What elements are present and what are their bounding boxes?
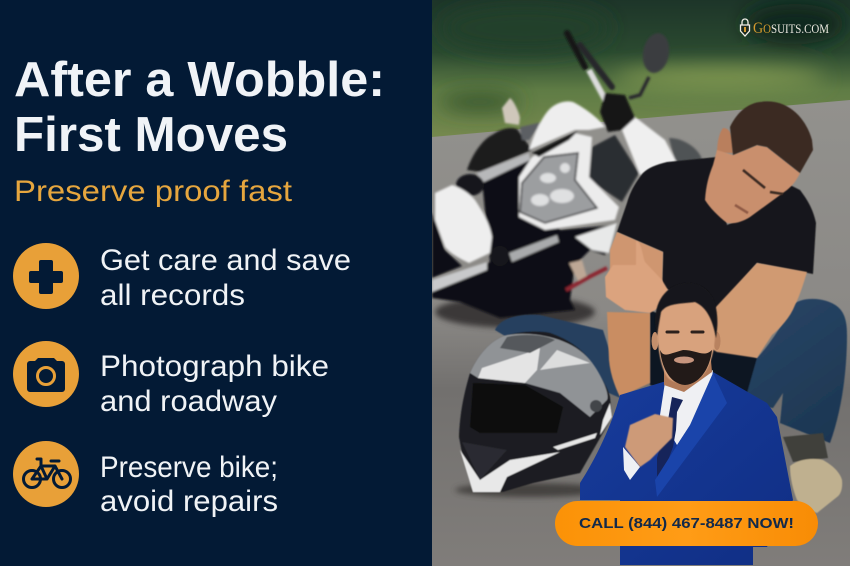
step 2 text: Photograph bike xyxy=(100,350,329,383)
lower fork bars xyxy=(509,235,559,262)
shirt cuff xyxy=(623,447,640,480)
step 3: preserve bike xyxy=(13,441,278,518)
facial features xyxy=(735,170,783,213)
logo wordmark: GOSUITS.COM xyxy=(753,20,829,37)
motorcycle xyxy=(432,31,702,328)
step 3 text: Preserve bike; xyxy=(100,451,278,484)
turn signal xyxy=(502,98,520,125)
dark opening xyxy=(470,383,563,433)
beard xyxy=(660,350,712,385)
eyes xyxy=(667,330,703,334)
step 1 text: all records xyxy=(100,279,245,312)
suit xyxy=(580,372,793,565)
face xyxy=(705,145,800,223)
jeans xyxy=(495,299,847,443)
chin white xyxy=(460,450,560,492)
shoe xyxy=(783,433,842,513)
call to action button xyxy=(555,501,818,546)
ears and face xyxy=(652,332,658,350)
dark windscreen xyxy=(467,128,532,172)
white headlight mask xyxy=(519,133,619,230)
white side trim xyxy=(600,403,612,435)
step 1 text xyxy=(100,244,351,312)
handlebars xyxy=(567,33,585,67)
left white fairing xyxy=(435,185,492,263)
hand on arm xyxy=(605,241,668,313)
icon: medical cross xyxy=(13,243,79,309)
seated man xyxy=(495,101,847,513)
mirror xyxy=(629,77,649,98)
rear tank dark xyxy=(669,138,702,165)
icon: padlock xyxy=(740,19,750,36)
black slash xyxy=(532,130,579,157)
headlight xyxy=(520,153,597,223)
white nose xyxy=(529,101,605,150)
left navy panel xyxy=(0,0,432,566)
step 2 text: and roadway xyxy=(100,385,277,418)
attorney xyxy=(580,283,793,565)
neck xyxy=(664,350,712,392)
step 1 text: Get care and save xyxy=(100,244,351,277)
visor white stripes xyxy=(478,348,540,383)
hair xyxy=(730,101,813,173)
step 1: get care xyxy=(13,243,351,312)
step 3 text: avoid repairs xyxy=(100,485,278,518)
shirt collar xyxy=(660,370,713,445)
ear xyxy=(717,128,733,153)
rear white tank xyxy=(622,117,677,175)
helmet xyxy=(455,332,612,497)
hair xyxy=(655,283,717,338)
black shirt xyxy=(617,157,816,310)
near forearm xyxy=(607,312,650,397)
lower white xyxy=(575,223,617,253)
far arm xyxy=(712,262,808,359)
hand at tie xyxy=(625,414,673,467)
bike shadow xyxy=(435,296,595,328)
visor glass xyxy=(470,334,608,417)
step 2: photograph xyxy=(13,341,329,418)
title: After a Wobble: xyxy=(14,53,385,107)
subtitle: Preserve proof fast xyxy=(14,175,293,208)
bike frame dark mass xyxy=(432,160,617,318)
icon: camera xyxy=(13,341,79,407)
upper fork bar xyxy=(477,153,530,183)
mouth xyxy=(674,356,694,364)
chin vent xyxy=(462,442,507,480)
photo: crash scene xyxy=(432,0,850,566)
step 2 text xyxy=(100,350,329,418)
call to action button: CALL (844) 467-8487 NOW! xyxy=(579,515,794,532)
dark side panel xyxy=(589,135,639,202)
tie xyxy=(657,397,683,482)
title: First Moves xyxy=(14,108,288,162)
background foliage and road xyxy=(432,0,850,566)
signal and red frame xyxy=(569,260,587,283)
near upper arm xyxy=(610,232,664,282)
icon: bicycle xyxy=(13,441,79,507)
logo: GoSuits.com xyxy=(740,19,829,37)
step 3 text xyxy=(100,451,278,518)
helmet shell xyxy=(459,332,612,492)
lapel xyxy=(655,373,727,497)
title xyxy=(14,53,385,162)
